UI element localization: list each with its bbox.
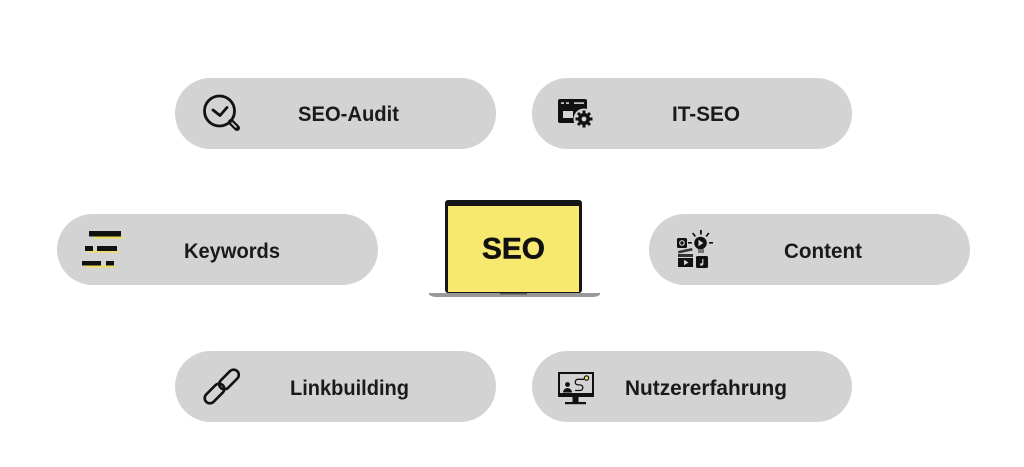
- label: Linkbuilding: Linkbuilding: [290, 377, 409, 400]
- icon: monitor with user journey: [558, 373, 594, 404]
- panel: IT-SEO: [532, 78, 852, 149]
- icon: browser window with gear: [558, 99, 594, 130]
- panel: Content: [649, 214, 970, 285]
- laptop base: [429, 293, 600, 297]
- label: SEO-Audit: SEO-Audit: [298, 103, 399, 126]
- label: Content: Content: [784, 240, 862, 263]
- icon: keyword bars: [82, 231, 123, 268]
- base notch: [500, 293, 527, 294]
- label: Keywords: Keywords: [184, 240, 280, 263]
- icon: media collage: [677, 230, 713, 268]
- label: IT-SEO: IT-SEO: [672, 103, 740, 126]
- laptop: SEO: [429, 200, 600, 297]
- label: Nutzererfahrung: Nutzererfahrung: [625, 377, 787, 400]
- laptop screen: [445, 200, 582, 293]
- panel: Linkbuilding: [175, 351, 496, 422]
- icon: magnifier with check: [204, 96, 237, 128]
- panel: SEO-Audit: [175, 78, 496, 149]
- panel: Nutzererfahrung: [532, 351, 852, 422]
- icon: chain link: [203, 368, 241, 405]
- panel: Keywords: [57, 214, 378, 285]
- label: SEO: SEO: [482, 232, 545, 266]
